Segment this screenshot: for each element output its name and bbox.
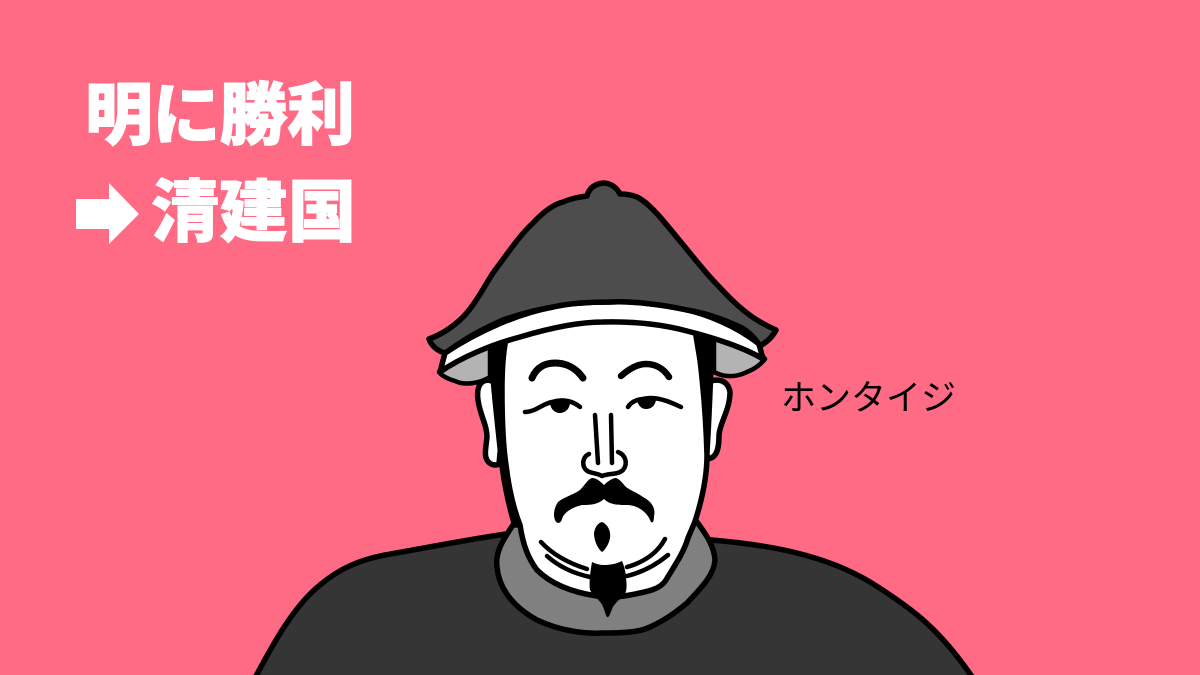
white hat band xyxy=(440,302,763,372)
left eye xyxy=(525,400,580,412)
moustache xyxy=(554,478,654,523)
hat crown xyxy=(429,183,776,353)
goatee xyxy=(590,561,627,617)
title: founding of Qing: 清建国 xyxy=(151,175,356,251)
pupils xyxy=(550,400,656,413)
label: Hong Taiji: ホンタイジ xyxy=(781,379,956,418)
illustration: Hong Taiji portrait xyxy=(255,183,973,675)
icon: arrow xyxy=(76,183,139,244)
gray under-brim xyxy=(439,335,765,384)
soul patch xyxy=(594,522,610,552)
left eyebrow xyxy=(532,363,583,378)
right eye xyxy=(628,398,681,407)
title: victory over Ming: 明に勝利 xyxy=(85,78,355,154)
left ear xyxy=(478,380,505,465)
right eyebrow xyxy=(621,364,669,377)
face xyxy=(502,317,707,597)
nose xyxy=(583,415,626,476)
right ear xyxy=(705,380,730,459)
robe body xyxy=(255,534,973,675)
collar xyxy=(497,522,715,633)
chin lines xyxy=(541,539,668,577)
hair sideburns xyxy=(490,325,714,527)
